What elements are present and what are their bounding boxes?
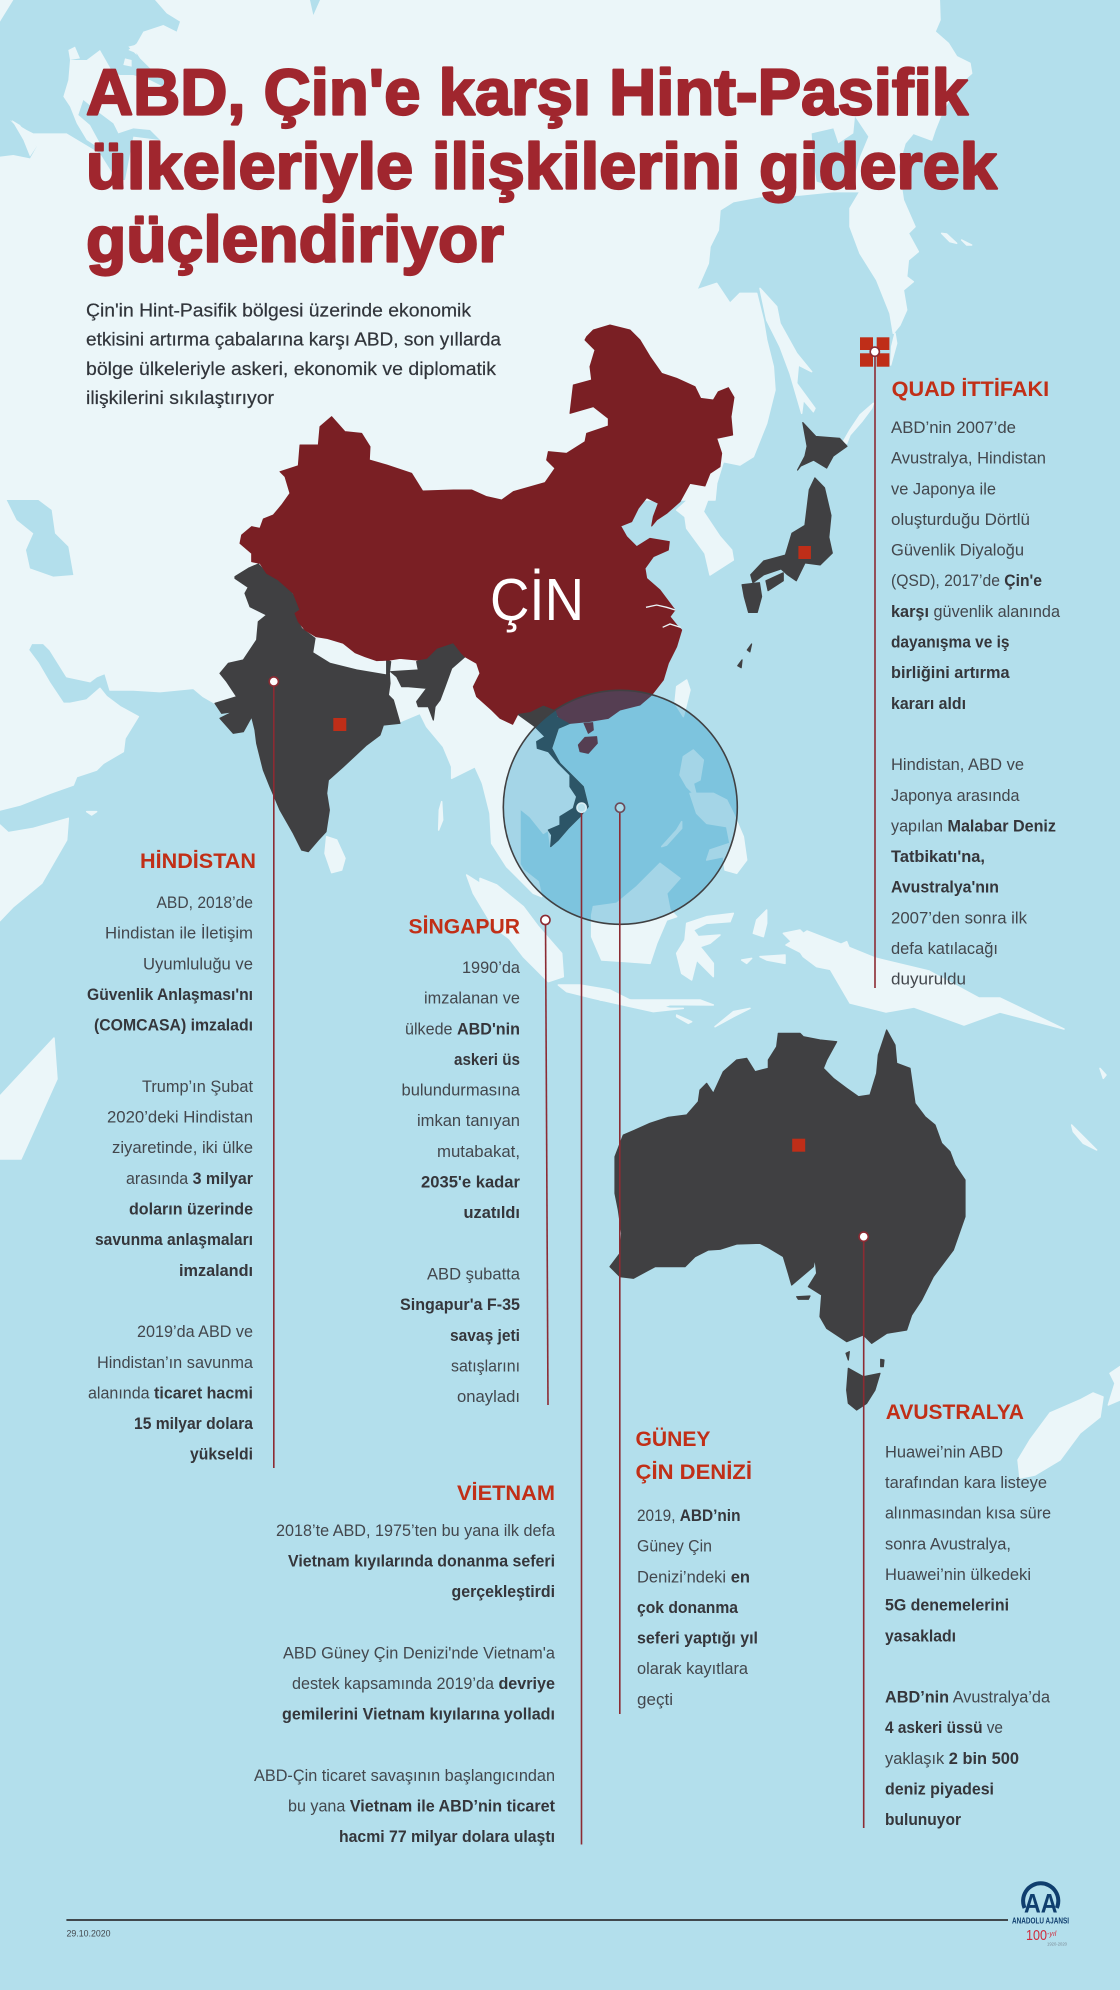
panel: India [87, 849, 256, 1464]
body: QUAD: karşı güvenlik alanında [891, 603, 1061, 621]
body: South China Sea: 2019, ABD’nin [637, 1507, 740, 1525]
body: Vietnam: bu yana Vietnam ile ABD’nin ticaret [288, 1798, 555, 1816]
heading: Vietnam: VİETNAM [457, 1481, 555, 1505]
body: India: 15 milyar dolara [134, 1415, 254, 1433]
QUAD icon, line and pin [860, 337, 889, 988]
country: India [215, 564, 465, 852]
title [86, 56, 998, 276]
body: India: ziyaretinde, iki ülke [112, 1139, 253, 1157]
marker squares on countries [333, 546, 811, 1152]
body: India: Güvenlik Anlaşması'nı [87, 986, 253, 1004]
body: Australia: yasakladı [885, 1627, 956, 1645]
body: South China Sea: olarak kayıtlara [637, 1660, 749, 1678]
body: QUAD: kararı aldı [891, 695, 966, 713]
country: China [240, 325, 734, 724]
body: South China Sea: Denizi’ndeki en [637, 1568, 750, 1586]
panel: Australia [885, 1400, 1051, 1829]
body: Singapore: imkan tanıyan [417, 1112, 520, 1130]
body: QUAD: defa katılacağı [891, 940, 998, 958]
body: Singapore: imzalanan ve [424, 990, 520, 1008]
intro text: bölge ülkeleriyle askeri, ekonomik ve diplomatik [86, 359, 497, 379]
heading: South China Sea: ÇİN DENİZİ [636, 1460, 752, 1484]
logo: Anadolu Ajansı: 1920-2020 [1047, 1942, 1067, 1946]
body: QUAD: ABD’nin 2007’de [891, 419, 1016, 437]
body: QUAD: Avustralya'nın [891, 879, 999, 897]
intro text: Çin'in Hint-Pasifik bölgesi üzerinde ekonomik [86, 301, 472, 321]
logo: Anadolu Ajansı: -yıl [1047, 1931, 1057, 1938]
title: güçlendiriyor [86, 203, 504, 276]
body: Singapore: mutabakat, [437, 1143, 520, 1161]
country: Vietnam [517, 704, 588, 847]
body: India: imzalandı [179, 1262, 253, 1280]
intro text [86, 301, 502, 408]
body: QUAD: Hindistan, ABD ve [891, 756, 1024, 774]
body: India [87, 894, 254, 1464]
body: South China Sea: çok donanma [637, 1599, 739, 1617]
country: Australia [610, 1030, 965, 1410]
line and pin: Vietnam [577, 803, 586, 1844]
country label: China: ÇİN [490, 567, 584, 633]
body: Singapore: ABD şubatta [427, 1266, 521, 1284]
body: QUAD: Tatbikatı'na, [891, 848, 985, 866]
panel: Singapore [400, 914, 521, 1406]
body: Singapore: askeri üs [454, 1051, 520, 1069]
body: India: ABD, 2018’de [156, 894, 253, 912]
body: QUAD: dayanışma ve iş [891, 634, 1010, 652]
body: Singapore [400, 959, 521, 1406]
body: India: (COMCASA) imzaladı [94, 1017, 253, 1035]
title: ABD, Çin'e karşı Hint-Pasifik [86, 56, 969, 128]
body: Australia: deniz piyadesi [885, 1780, 994, 1798]
body: Australia: Huawei’nin ülkedeki [885, 1566, 1031, 1584]
body: Vietnam: ABD-Çin ticaret savaşının başlangıcından [254, 1767, 555, 1785]
body: QUAD: duyuruldu [891, 971, 966, 989]
body: Singapore: Singapur'a F-35 [400, 1296, 520, 1314]
body: QUAD: Avustralya, Hindistan [891, 450, 1046, 468]
body: Vietnam: Vietnam kıyılarında donanma seferi [288, 1553, 555, 1571]
body: Australia: yaklaşık 2 bin 500 [885, 1750, 1019, 1768]
body: South China Sea: geçti [637, 1691, 673, 1709]
body: South China Sea: Güney Çin [637, 1538, 712, 1556]
body: India: yükseldi [190, 1446, 253, 1464]
panel: QUAD [891, 377, 1061, 989]
body: Vietnam [254, 1522, 556, 1846]
footer rule [66, 1919, 1008, 1921]
body: India: Hindistan ile İletişim [105, 924, 253, 943]
heading: QUAD: QUAD İTTİFAKI [892, 377, 1049, 401]
heading: South China Sea [636, 1426, 752, 1484]
body: Singapore: 2035'e kadar [421, 1174, 521, 1192]
body: Singapore: 1990’da [462, 959, 521, 977]
island: Hainan [578, 723, 597, 753]
intro text: etkisini artırma çabalarına karşı ABD, son yıllarda [86, 330, 502, 350]
body: QUAD: oluşturduğu Dörtlü [891, 511, 1030, 529]
heading: Singapore: SİNGAPUR [408, 914, 520, 938]
body: India: arasında 3 milyar [126, 1170, 254, 1188]
body: Vietnam: gemilerini Vietnam kıyılarına yolladı [282, 1706, 555, 1724]
logo: Anadolu Ajansı: AA [1024, 1889, 1058, 1919]
title: ülkeleriyle ilişkilerini giderek [86, 130, 998, 202]
date: 29.10.2020 [66, 1928, 110, 1938]
body: Singapore: onayladı [457, 1388, 520, 1406]
body: South China Sea [637, 1507, 758, 1709]
body: Singapore: savaş jeti [450, 1327, 520, 1345]
body: Vietnam: hacmi 77 milyar dolara ulaştı [339, 1828, 555, 1846]
body: India: Uyumluluğu ve [143, 955, 253, 973]
line and pin: South China Sea [615, 803, 625, 1714]
body: Australia [885, 1443, 1051, 1829]
body: India: alanında ticaret hacmi [88, 1384, 253, 1402]
country: Japan [738, 423, 847, 668]
body: Australia: Huawei’nin ABD [885, 1443, 1003, 1461]
body: Singapore: bulundurmasına [402, 1082, 521, 1100]
highlight circle: South China Sea [503, 690, 737, 924]
body: Vietnam: ABD Güney Çin Denizi'nde Vietnam'a [283, 1644, 556, 1662]
panel: Vietnam [254, 1481, 556, 1846]
body: QUAD: (QSD), 2017’de Çin'e [891, 572, 1042, 590]
intro text: ilişkilerini sıkılaştırıyor [86, 388, 274, 408]
body: India: savunma anlaşmaları [95, 1231, 253, 1249]
body: India: 2020’deki Hindistan [107, 1108, 253, 1126]
body: Vietnam: gerçekleştirdi [452, 1583, 555, 1601]
body: QUAD: birliğini artırma [891, 664, 1010, 682]
body: Australia: sonra Avustralya, [885, 1535, 1011, 1553]
body: India: 2019’da ABD ve [137, 1323, 253, 1341]
map: inland and polar seas [0, 0, 868, 577]
panel: South China Sea [636, 1426, 758, 1709]
map: light land masses [0, 0, 1120, 1478]
body: Australia: 4 askeri üssü ve [885, 1719, 1003, 1737]
body: Australia: bulunuyor [885, 1811, 962, 1829]
body: QUAD [891, 419, 1061, 989]
line and pin: India [269, 677, 278, 1468]
body: Vietnam: destek kapsamında 2019’da devriye [292, 1675, 555, 1693]
heading: India: HİNDİSTAN [140, 849, 256, 873]
logo: Anadolu Ajansı: 100 [1026, 1927, 1047, 1944]
body: Australia: ABD’nin Avustralya’da [885, 1689, 1051, 1707]
body: QUAD: yapılan Malabar Deniz [891, 817, 1056, 835]
line and pin: Singapore [541, 915, 550, 1405]
body: QUAD: ve Japonya ile [891, 480, 996, 498]
body: Vietnam: 2018’te ABD, 1975’ten bu yana ilk defa [276, 1522, 556, 1540]
body: India: doların üzerinde [129, 1200, 253, 1218]
body: Singapore: ülkede ABD'nin [405, 1020, 520, 1038]
body: India: Hindistan’ın savunma [97, 1354, 254, 1372]
body: QUAD: 2007’den sonra ilk [891, 909, 1028, 927]
body: Australia: tarafından kara listeye [885, 1474, 1047, 1492]
callout lines and pins [269, 337, 889, 1844]
heading: South China Sea: GÜNEY [636, 1426, 710, 1451]
logo: Anadolu Ajansı [1012, 1883, 1069, 1946]
body: Australia: alınmasından kısa süre [885, 1505, 1051, 1523]
logo: Anadolu Ajansı: ANADOLU AJANSI [1012, 1916, 1069, 1925]
body: Singapore: satışlarını [451, 1358, 520, 1376]
body: QUAD: Güvenlik Diyaloğu [891, 542, 1024, 560]
body: QUAD: Japonya arasında [891, 787, 1020, 805]
line and pin: Australia [859, 1232, 868, 1828]
body: Australia: 5G denemelerini [885, 1597, 1009, 1615]
heading: Australia: AVUSTRALYA [886, 1400, 1024, 1424]
body: South China Sea: seferi yaptığı yıl [637, 1630, 758, 1648]
body: Singapore: uzatıldı [464, 1204, 520, 1222]
map: islands inside top-left sea [12, 45, 137, 157]
body: India: Trump’ın Şubat [142, 1078, 253, 1096]
